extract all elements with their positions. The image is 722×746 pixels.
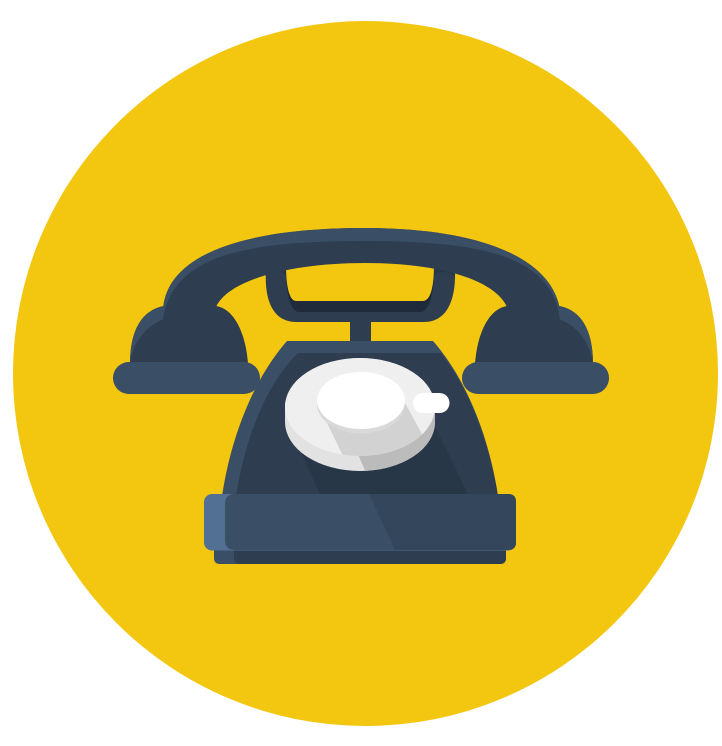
finger stop: [413, 393, 450, 413]
right ear cup: [475, 306, 593, 364]
dial centre: [317, 372, 405, 429]
cradle: [266, 266, 455, 341]
icon: telephone: [113, 228, 609, 564]
phone body: [222, 341, 498, 496]
base band: [204, 494, 516, 564]
left handset rest bar: [113, 362, 260, 394]
handset: [163, 228, 560, 322]
right handset rest bar: [462, 362, 609, 394]
left ear cup: [130, 306, 248, 364]
rotary dial: [285, 358, 450, 475]
